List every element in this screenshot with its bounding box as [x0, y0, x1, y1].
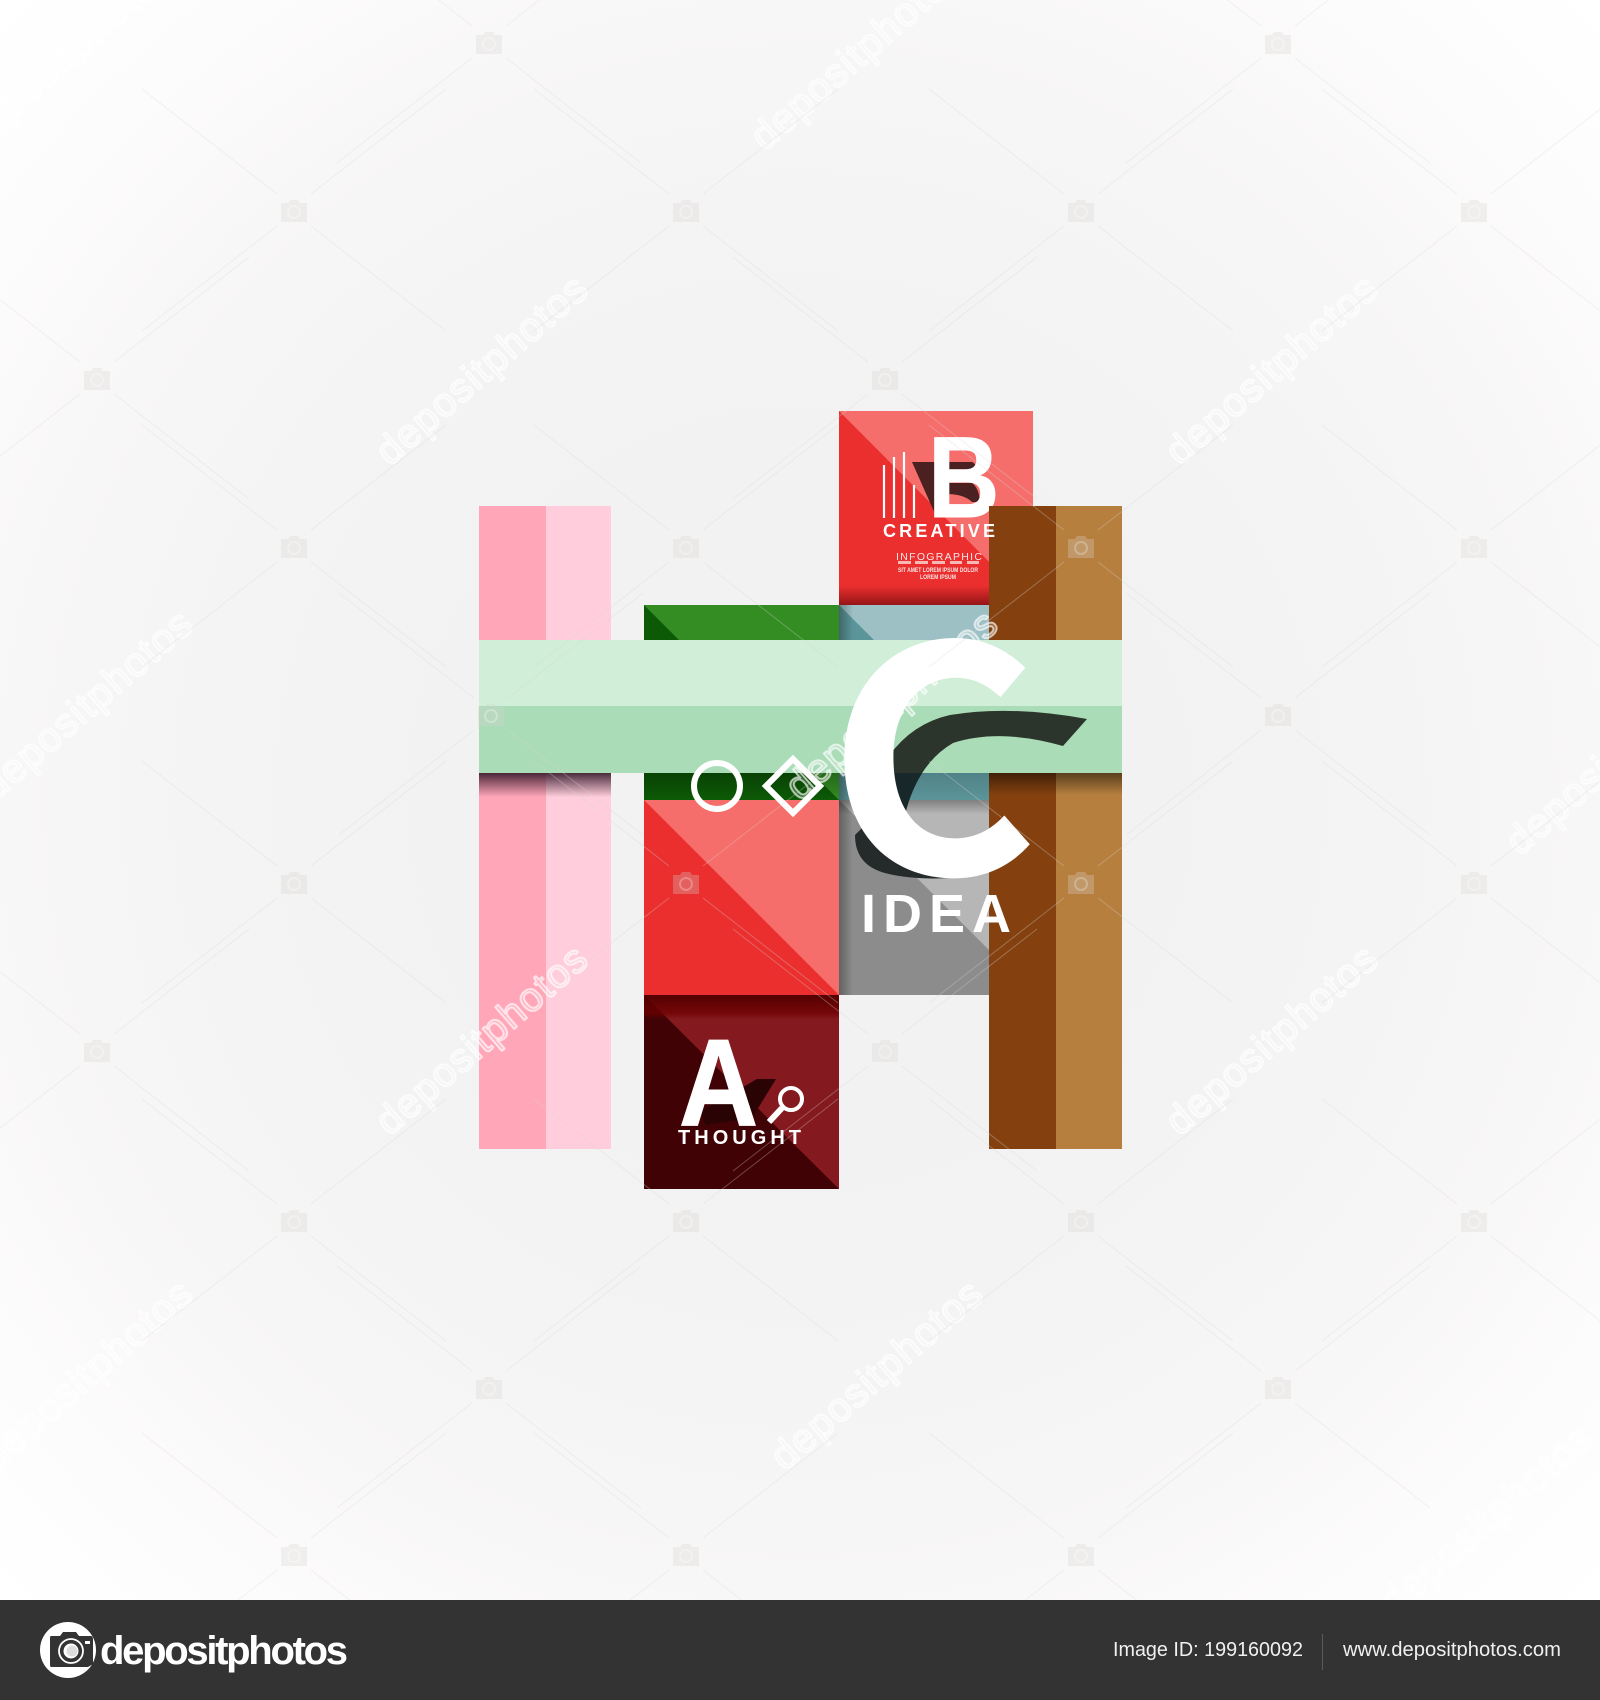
icon: circle — [694, 763, 740, 809]
watermark text: depositphotos — [762, 1272, 991, 1479]
label: creative: CREATIVE — [883, 521, 995, 541]
icon: camera logo — [40, 1622, 96, 1678]
watermark text: depositphotos — [1157, 267, 1386, 474]
watermark text: depositphotos — [1157, 937, 1386, 1144]
image id: Image ID: 199160092 — [1113, 1639, 1303, 1661]
label: infographic: INFOGRAPHIC — [896, 551, 982, 563]
panel: pink bar — [479, 506, 611, 1149]
panel: tile B creative (red) — [839, 411, 1033, 606]
label: idea: IDEA — [861, 884, 1011, 944]
small caption: SIT AMET LOREM IPSUM DOLOR — [898, 568, 979, 574]
small caption second line: LOREM IPSUM — [920, 575, 956, 581]
label: thought: THOUGHT — [678, 1127, 801, 1149]
panel: tile gray idea — [839, 800, 989, 995]
divider bars — [898, 561, 979, 564]
letter B shadow — [912, 462, 980, 516]
footer divider — [1322, 1634, 1324, 1670]
letter A: A — [679, 1014, 758, 1151]
panel: tile red — [644, 800, 839, 995]
letter B: B — [928, 413, 999, 542]
panel: tile A thought (dark red) — [644, 995, 839, 1189]
panel: mint band — [479, 640, 1122, 773]
panel: tile blue-gray — [839, 605, 989, 800]
footer bar — [0, 1600, 1600, 1700]
icon: magnifier — [769, 1088, 802, 1122]
watermark text: depositphotos — [1372, 1417, 1600, 1624]
icon: vertical lines — [884, 452, 914, 518]
letter C shadow — [855, 711, 1087, 878]
panel: brown bar — [989, 506, 1122, 1149]
panel: creative text block — [883, 521, 995, 581]
footer logo wordmark: depositphotos — [100, 1629, 348, 1673]
watermark text: depositphotos — [777, 602, 1006, 809]
watermark text: depositphotos — [367, 267, 596, 474]
website url: www.depositphotos.com — [1342, 1639, 1561, 1661]
panel: tile green — [644, 605, 839, 800]
letter A shadow — [700, 1079, 776, 1125]
icon: diamond — [766, 759, 820, 813]
watermark text: depositphotos — [367, 937, 596, 1144]
letter C: C — [827, 510, 1038, 965]
